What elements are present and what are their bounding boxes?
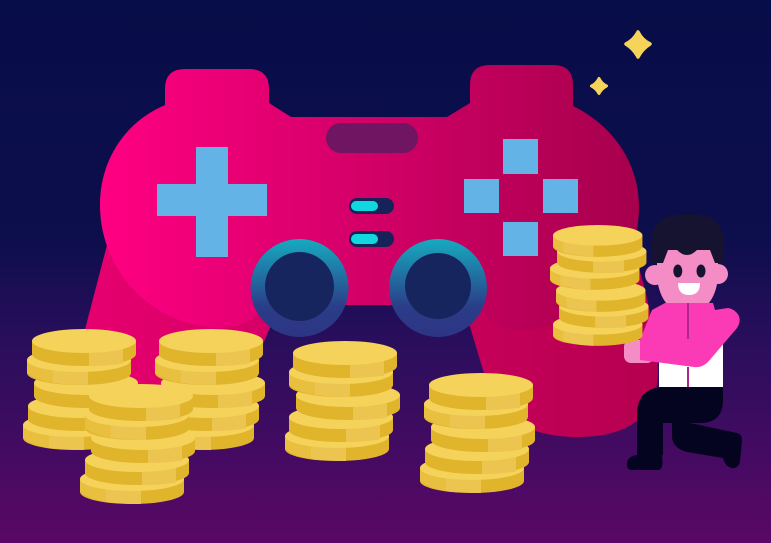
icon: small sparkle bbox=[592, 78, 606, 94]
left hand bbox=[624, 340, 654, 363]
controller body bbox=[100, 65, 639, 330]
toggle top bbox=[349, 198, 394, 214]
coin stack: front left bbox=[80, 384, 195, 504]
game controller bbox=[81, 65, 658, 437]
coin stack: held by character bbox=[550, 225, 648, 346]
white shirt bbox=[659, 340, 723, 388]
icon: large sparkle bbox=[626, 32, 650, 57]
right joystick bbox=[389, 239, 487, 337]
face bbox=[657, 248, 718, 304]
pink jacket bbox=[640, 303, 740, 367]
trousers bbox=[627, 387, 742, 470]
ears bbox=[645, 264, 728, 285]
character bbox=[624, 214, 742, 470]
controller right grip bbox=[465, 245, 658, 437]
hair bbox=[652, 214, 724, 263]
action buttons bbox=[464, 139, 578, 256]
toggle bottom bbox=[349, 231, 394, 247]
coin stack: right bbox=[420, 373, 535, 493]
coin stack: back middle bbox=[150, 329, 265, 450]
left joystick bbox=[250, 239, 348, 337]
touchpad pill bbox=[326, 123, 418, 153]
coin stack: centre bbox=[285, 341, 400, 461]
coin stack: back left bbox=[23, 329, 138, 450]
controller left grip bbox=[81, 245, 275, 437]
d-pad cross bbox=[157, 147, 267, 257]
eyes bbox=[673, 264, 706, 278]
jacket zipper bbox=[687, 303, 689, 387]
smile bbox=[678, 283, 700, 295]
